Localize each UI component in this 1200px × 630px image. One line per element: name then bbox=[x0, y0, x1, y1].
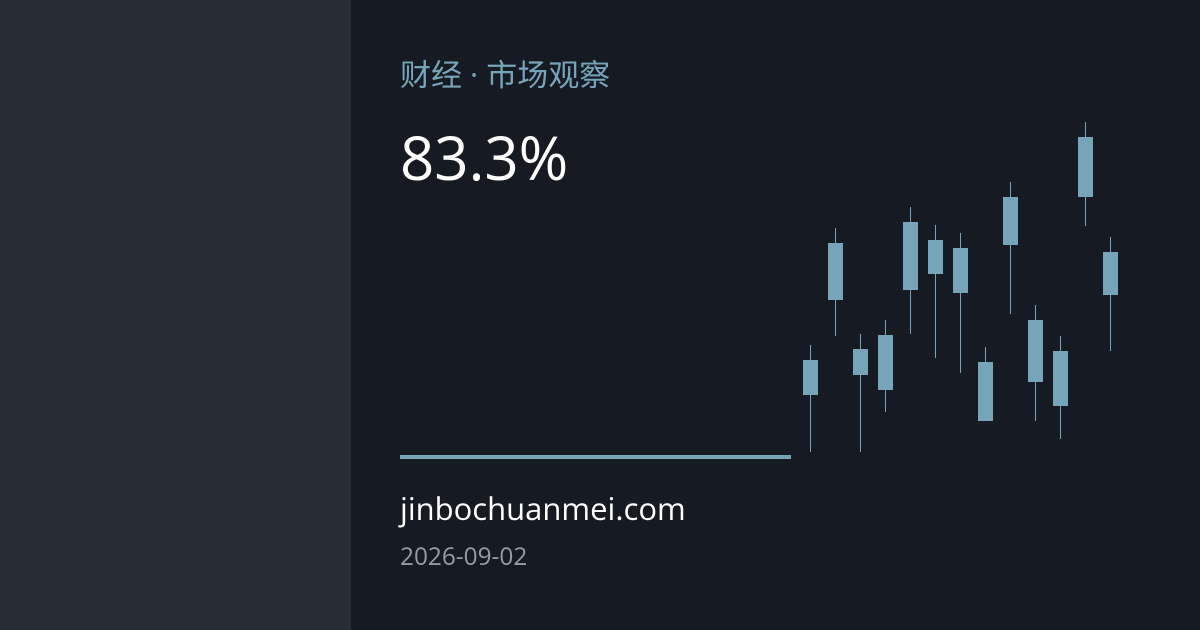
candle 9 bbox=[1003, 182, 1018, 314]
heading: category: 财经 · 市场观察 bbox=[400, 54, 610, 96]
candle 10 bbox=[1028, 305, 1043, 421]
headline figure: 83.3%: 83.3% bbox=[400, 116, 568, 198]
candle 12 bbox=[1078, 122, 1093, 226]
candle 6 bbox=[928, 225, 943, 358]
site domain: jinbochuanmei.com bbox=[400, 488, 686, 530]
candle 4 bbox=[878, 320, 893, 412]
candle 7 bbox=[953, 233, 968, 373]
candle 8 bbox=[978, 347, 993, 421]
candle 1 bbox=[803, 345, 818, 452]
candle 5 bbox=[903, 207, 918, 334]
accent rule bbox=[400, 455, 791, 459]
candle 11 bbox=[1053, 336, 1068, 439]
candle 13 bbox=[1103, 237, 1118, 351]
candle 2 bbox=[828, 228, 843, 336]
date: 2026-09-02 bbox=[400, 540, 527, 573]
candle 3 bbox=[853, 334, 868, 452]
panel: left sidebar bbox=[0, 0, 351, 630]
